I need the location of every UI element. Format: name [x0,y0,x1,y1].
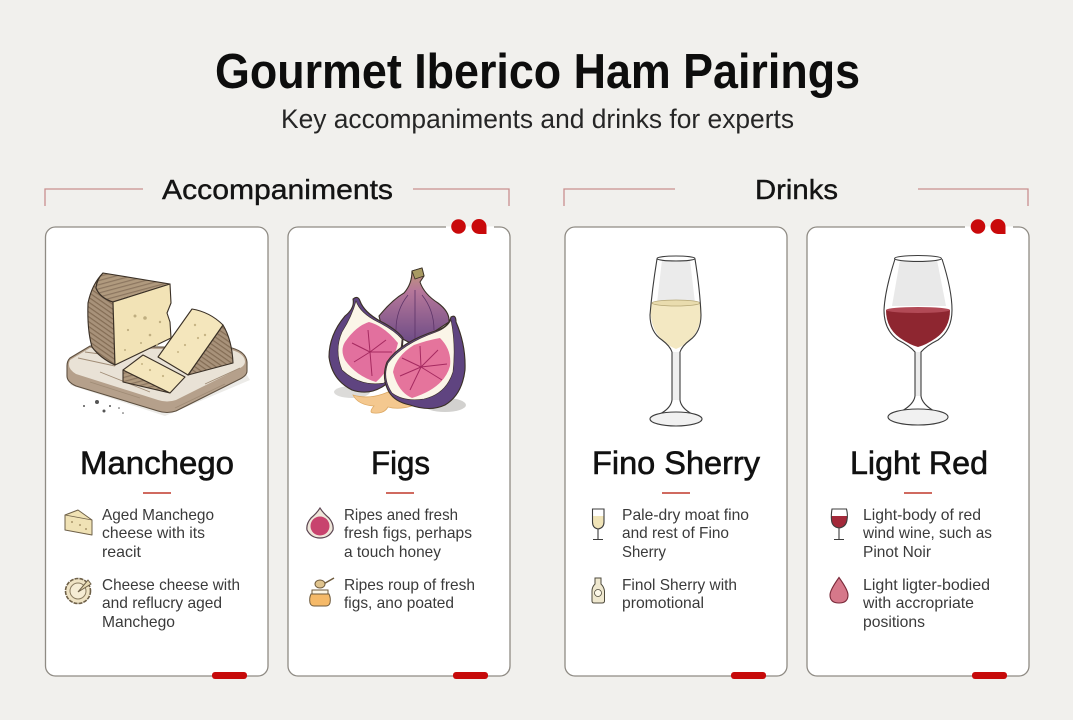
bullet: aged manchego [65,507,214,561]
icon: small sherry glass [592,509,604,540]
right fig half [384,316,465,408]
bullet: ripes fresh figs: fresh figs, perhaps [344,525,472,542]
bottom accent pill [453,672,488,679]
bullet: light ligter-bodied: Light ligter-bodied [863,577,990,594]
bullet: ripes fresh figs [307,507,472,561]
icon: red corner dots [971,219,1006,234]
icon: cheese wedge [65,510,92,535]
icon: sherry bottle [592,578,604,603]
bullet: pale-dry: and rest of Fino [622,525,729,542]
bullet: cheese cheese [66,577,240,631]
icon: fig half [307,508,333,538]
bottom accent pill [212,672,247,679]
section heading: drinks: Drinks [755,174,838,205]
bullet: pale-dry [592,507,749,561]
icon: wine drop [830,578,848,603]
bullet: ripes roup [310,577,475,612]
section heading: drinks [564,174,1028,206]
bullet: ripes roup: Ripes roup of fresh [344,577,475,594]
bullet: light ligter-bodied: with accropriate [862,595,974,612]
left fig half [329,297,403,392]
bullet: aged manchego: cheese with its [102,525,205,542]
bullet: finol sherry [592,577,737,612]
bottom accent pill [972,672,1007,679]
card title: Light Red [850,445,988,481]
icon: round cheese [66,578,91,604]
bullet: light-body: Light-body of red [863,507,981,524]
section heading: accompaniments [45,174,509,206]
bullet: finol sherry: promotional [622,595,704,612]
illustration: figs with honey [329,268,466,413]
bullet: cheese cheese: Manchego [102,614,175,631]
card title: Manchego [80,445,234,481]
bullet: ripes fresh figs: a touch honey [344,544,441,561]
bullet: ripes fresh figs: Ripes aned fresh [344,507,458,524]
subtitle: Key accompaniments and drinks for experts [281,104,794,134]
icon: small red glass [831,509,847,540]
card title: Fino Sherry [592,445,760,481]
bullet: finol sherry: Finol Sherry with [622,577,737,594]
bottom accent pill [731,672,766,679]
illustration: sherry glass [650,256,702,426]
icon: honey jar with dipper [310,578,334,606]
panel: Manchego [46,227,268,679]
bullet: light ligter-bodied: positions [863,614,925,631]
panel: Figs [288,218,510,679]
bullet: aged manchego: Aged Manchego [102,507,214,524]
icon: red corner dots [451,219,486,234]
title: Gourmet Iberico Ham Pairings [215,45,860,99]
bullet: light-body: wind wine, such as [862,525,992,542]
illustration: manchego cheese on board [67,273,250,416]
section heading: accompaniments: Accompaniments [162,174,393,205]
bullet: light ligter-bodied [830,577,990,631]
bullet: aged manchego: reacit [102,544,142,561]
bullet: pale-dry: Pale-dry moat fino [622,507,749,524]
illustration: red wine glass [884,256,952,425]
bullet: light-body: Pinot Noir [863,544,931,561]
panel: Light Red [807,218,1029,679]
bullet: ripes roup: figs, ano poated [344,595,454,612]
bullet: pale-dry: Sherry [622,544,666,561]
back fig [379,268,449,345]
card title: Figs [371,445,430,481]
panel: Fino Sherry [565,227,787,679]
bullet: cheese cheese: and reflucry aged [102,595,222,612]
bullet: light-body [831,507,992,561]
bullet: cheese cheese: Cheese cheese with [102,577,240,594]
